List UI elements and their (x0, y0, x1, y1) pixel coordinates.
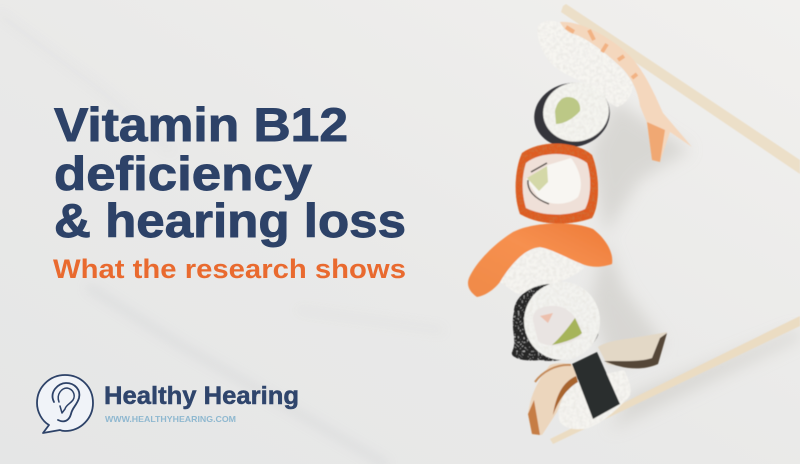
soft shadows under the food (590, 100, 800, 430)
title: deficiency (54, 147, 312, 200)
logo: Healthy Hearing (37, 375, 299, 433)
title: Vitamin B12 (54, 98, 348, 151)
avocado maki roll (528, 76, 616, 154)
icon: ear in speech bubble (37, 375, 93, 433)
wordmark: Healthy Hearing (104, 382, 299, 410)
nori band (572, 352, 620, 419)
eel nigiri with nori band (528, 332, 667, 435)
chopstick: bottom (550, 316, 800, 444)
title (54, 98, 406, 247)
title: & hearing loss (54, 194, 406, 247)
photo: sushi and chopsticks (468, 4, 800, 444)
chopstick: top (561, 4, 800, 174)
url: WWW.HEALTHYHEARING.COM (105, 414, 236, 424)
black sesame roll (512, 282, 600, 361)
shrimp nigiri (538, 21, 692, 162)
tobiko orange roll (516, 143, 598, 224)
salmon nigiri (468, 223, 612, 297)
subtitle: What the research shows (53, 254, 406, 284)
